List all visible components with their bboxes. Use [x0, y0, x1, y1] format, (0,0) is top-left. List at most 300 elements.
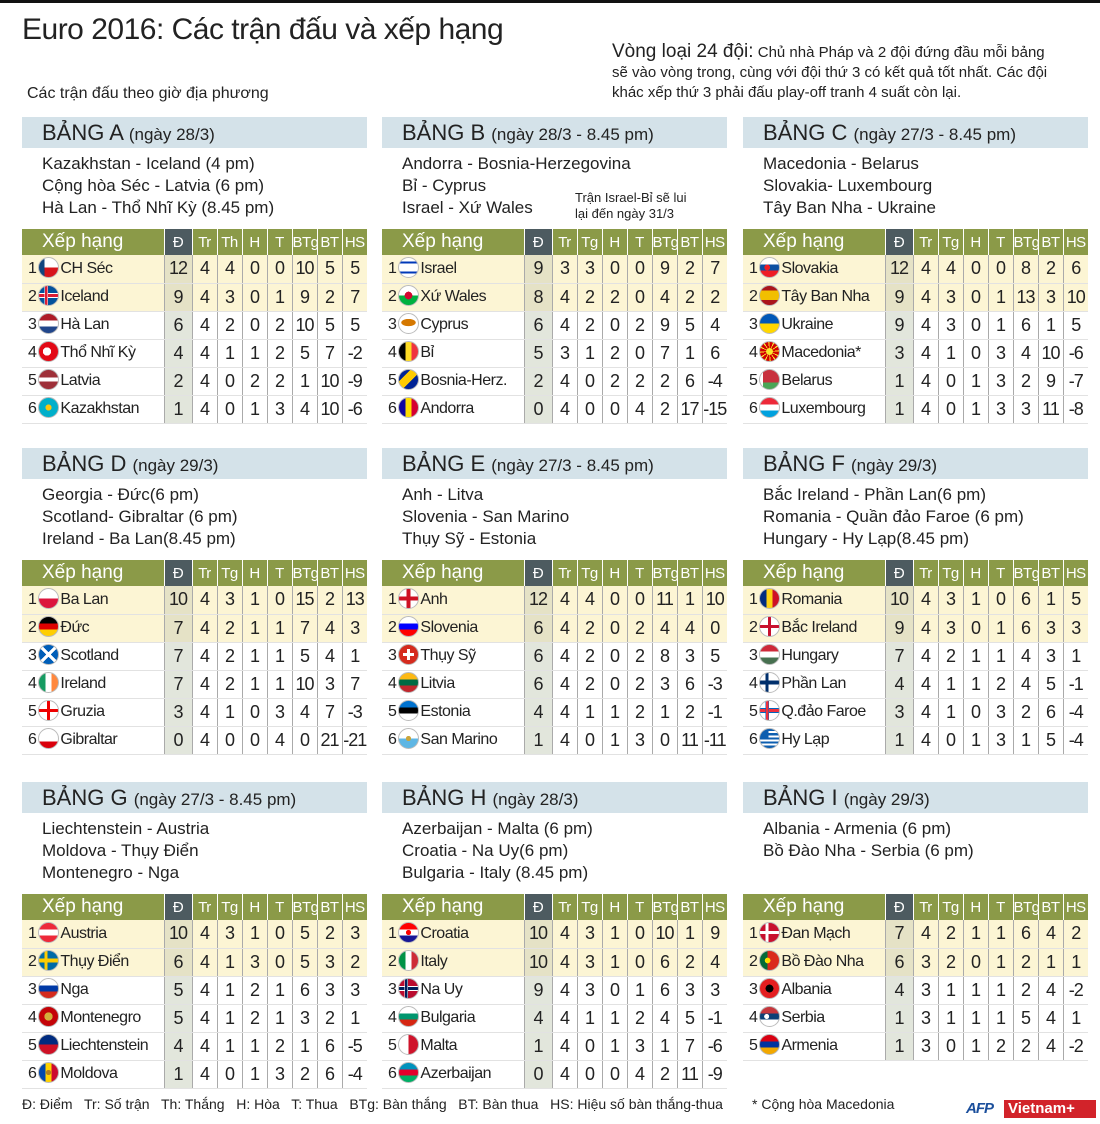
- standings table: 1: [946, 702, 955, 722]
- standings table: 4: [200, 1008, 209, 1028]
- standings table: 2: [635, 618, 644, 638]
- standings table: 1: [225, 1008, 234, 1028]
- matches: Montenegro - Nga: [42, 863, 179, 882]
- standings table: 1: [971, 398, 980, 418]
- standings table: Đ: [894, 898, 904, 916]
- standings table: 1: [250, 674, 259, 694]
- standings table: HS: [345, 564, 365, 582]
- standings table: Tg: [942, 564, 959, 582]
- standings table: 1: [610, 702, 619, 722]
- standings table: 5: [325, 314, 334, 334]
- standings table: Xếp hạng: [402, 231, 483, 252]
- standings table: 2: [275, 370, 284, 390]
- standings table: 4: [560, 702, 569, 722]
- standings table: 3: [275, 398, 284, 418]
- standings table: 0: [971, 952, 980, 972]
- standings table: 3: [585, 980, 594, 1000]
- standings table: 4: [1021, 674, 1030, 694]
- standings table: -6: [348, 398, 362, 418]
- standings table: 1 Anh: [388, 591, 447, 608]
- standings table: 1: [1046, 589, 1055, 609]
- standings table: 9: [1046, 370, 1055, 390]
- standings table: 2: [1046, 258, 1055, 278]
- standings table: 12: [890, 258, 908, 278]
- standings table: 4: [560, 674, 569, 694]
- standings table: T: [275, 898, 284, 916]
- standings table: 3: [225, 923, 234, 943]
- standings table: 0: [225, 730, 234, 750]
- legend: Đ: Điểm Tr: Số trận Th: Thắng H: Hòa T: Thua BTg: Bàn thắng BT: Bàn thua HS: Hiệu số bàn thắng-thua: [22, 1096, 723, 1112]
- standings table: 0: [275, 258, 284, 278]
- logo: [966, 1100, 1096, 1118]
- standings table: 4 Litvia: [388, 675, 455, 692]
- standings table: -21: [343, 730, 366, 750]
- standings table: [382, 894, 727, 1089]
- standings table: 5 Gruzia: [28, 703, 105, 720]
- panel: group B: [382, 117, 727, 424]
- standings table: BT: [320, 234, 339, 250]
- standings table: Tr: [198, 564, 211, 582]
- standings table: Tg: [581, 234, 598, 250]
- standings table: H: [249, 234, 260, 250]
- standings table: T: [635, 234, 644, 250]
- standings table: 3: [996, 342, 1005, 362]
- standings table: 5 Latvia: [28, 372, 100, 389]
- standings table: 10: [295, 674, 314, 694]
- standings table: 2: [225, 314, 234, 334]
- standings table: T: [996, 898, 1005, 916]
- standings table: -9: [708, 1064, 722, 1084]
- standings table: -15: [703, 398, 726, 418]
- panel: group D: [22, 448, 367, 755]
- standings table: 1: [946, 674, 955, 694]
- matches: Albania - Armenia (6 pm): [763, 819, 951, 838]
- standings table: 3: [946, 314, 955, 334]
- standings table: HS: [705, 564, 725, 582]
- standings table: 2: [1021, 1036, 1030, 1056]
- standings table: 4: [894, 674, 904, 694]
- standings table: 0: [250, 258, 259, 278]
- standings table: 1 CH Séc: [28, 260, 113, 277]
- standings table: 1: [225, 342, 234, 362]
- standings table: -4: [1069, 730, 1083, 750]
- standings table: 9: [894, 286, 904, 306]
- standings table: 3: [946, 589, 955, 609]
- standings table: Tg: [221, 564, 238, 582]
- standings table: 1: [250, 646, 259, 666]
- standings table: 1: [275, 980, 284, 1000]
- standings table: -7: [1069, 370, 1083, 390]
- standings table: 8: [660, 646, 669, 666]
- standings table: 1: [610, 952, 619, 972]
- standings table: Đ: [894, 234, 904, 250]
- matches: Azerbaijan - Malta (6 pm): [402, 819, 593, 838]
- standings table: 4 Thổ Nhĩ Kỳ: [28, 344, 135, 361]
- standings table: 1: [660, 1036, 669, 1056]
- logo: Vietnam+: [1008, 1100, 1075, 1117]
- standings table: 13: [346, 589, 364, 609]
- standings table: 1: [1071, 646, 1080, 666]
- standings table: 3: [921, 1008, 930, 1028]
- standings table: 2: [685, 952, 694, 972]
- title: Euro 2016: Các trận đấu và xếp hạng: [22, 13, 503, 46]
- group header: BẢNG A (ngày 28/3): [42, 120, 215, 145]
- standings table: 0: [946, 370, 955, 390]
- standings table: 2: [610, 370, 619, 390]
- standings table: 1: [996, 1008, 1005, 1028]
- standings table: 4: [560, 1064, 569, 1084]
- standings table: -8: [1069, 398, 1083, 418]
- standings table: 0: [635, 286, 644, 306]
- standings table: Xếp hạng: [402, 896, 483, 917]
- standings table: 3 Albania: [749, 981, 831, 998]
- standings table: 2: [946, 923, 955, 943]
- standings table: 1: [610, 730, 619, 750]
- standings table: 4: [560, 923, 569, 943]
- standings table: 0: [300, 730, 309, 750]
- standings table: 10: [890, 589, 908, 609]
- standings table: 0: [660, 730, 669, 750]
- standings table: 4: [660, 1008, 669, 1028]
- standings table: 4: [560, 730, 569, 750]
- group header: BẢNG D (ngày 29/3): [42, 451, 218, 476]
- standings table: 3: [225, 589, 234, 609]
- standings table: 2: [685, 258, 694, 278]
- standings table: 1: [250, 923, 259, 943]
- standings table: 0: [635, 923, 644, 943]
- standings table: 2: [533, 370, 542, 390]
- standings table: 0: [610, 258, 619, 278]
- logo: AFP: [966, 1100, 993, 1117]
- standings table: 2: [250, 370, 259, 390]
- standings table: 3: [996, 730, 1005, 750]
- note: [575, 190, 686, 221]
- standings table: 10: [295, 258, 314, 278]
- standings table: 1: [225, 1036, 234, 1056]
- standings table: 2: [610, 286, 619, 306]
- standings table: 2 Bắc Ireland: [749, 619, 857, 636]
- standings table: 5: [685, 1008, 694, 1028]
- standings table: 4: [200, 370, 209, 390]
- standings table: 4: [533, 1008, 542, 1028]
- standings table: 5 Estonia: [388, 703, 470, 720]
- group header: [382, 117, 727, 148]
- standings table: 1: [533, 730, 542, 750]
- standings table: 1: [1021, 730, 1030, 750]
- standings table: 4: [921, 342, 930, 362]
- standings table: 4: [635, 398, 644, 418]
- standings table: 1: [971, 589, 980, 609]
- standings table: BT: [680, 898, 699, 916]
- standings table: 1: [946, 980, 955, 1000]
- standings table: 1: [971, 1036, 980, 1056]
- standings table: [743, 229, 1088, 424]
- standings table: 10: [655, 923, 674, 943]
- standings table: 1: [225, 952, 234, 972]
- standings table: 15: [295, 589, 314, 609]
- standings table: 1: [996, 646, 1005, 666]
- standings table: 1: [1071, 1008, 1080, 1028]
- standings table: 4: [560, 618, 569, 638]
- standings table: 10: [529, 923, 547, 943]
- standings table: 9: [173, 286, 182, 306]
- standings table: 8: [533, 286, 542, 306]
- standings table: 2: [946, 646, 955, 666]
- standings table: 4: [921, 258, 930, 278]
- standings table: 4: [173, 342, 182, 362]
- standings table: 1: [275, 1008, 284, 1028]
- standings table: 4: [1046, 1008, 1055, 1028]
- standings table: 1: [350, 646, 359, 666]
- standings table: -6: [708, 1036, 722, 1056]
- standings table: 4: [225, 258, 234, 278]
- standings table: 0: [610, 674, 619, 694]
- standings table: 1: [635, 980, 644, 1000]
- standings table: 0: [635, 589, 644, 609]
- standings table: Xếp hạng: [42, 896, 123, 917]
- standings table: Xếp hạng: [763, 896, 844, 917]
- group header: BẢNG F (ngày 29/3): [763, 451, 937, 476]
- standings table: 3: [685, 980, 694, 1000]
- standings table: BTg: [1014, 234, 1040, 250]
- standings table: 4: [921, 286, 930, 306]
- standings table: 3: [685, 646, 694, 666]
- standings table: 2 Bồ Đào Nha: [749, 953, 864, 970]
- standings table: 0: [610, 980, 619, 1000]
- standings table: 0: [946, 730, 955, 750]
- standings table: 4: [560, 952, 569, 972]
- standings table: Tr: [919, 564, 932, 582]
- group header: BẢNG C (ngày 27/3 - 8.45 pm): [763, 120, 1016, 145]
- standings table: 1: [1071, 952, 1080, 972]
- standings table: -1: [708, 1008, 722, 1028]
- standings table: 6: [533, 674, 542, 694]
- standings table: 6: [325, 1036, 334, 1056]
- group header: [382, 782, 727, 813]
- standings table: 4: [921, 370, 930, 390]
- standings table: H: [970, 564, 981, 582]
- standings table: -1: [1069, 674, 1083, 694]
- standings table: 2 Xứ Wales: [388, 288, 486, 305]
- standings table: 1: [996, 286, 1005, 306]
- standings table: 1: [225, 980, 234, 1000]
- standings table: BT: [1041, 898, 1060, 916]
- standings table: 4: [173, 1036, 182, 1056]
- standings table: [743, 560, 1088, 755]
- standings table: 6 San Marino: [388, 731, 497, 748]
- standings table: 0: [250, 314, 259, 334]
- matches: Cộng hòa Séc - Latvia (6 pm): [42, 176, 264, 195]
- standings table: 4: [921, 923, 930, 943]
- standings table: -11: [704, 730, 726, 750]
- standings table: T: [635, 564, 644, 582]
- standings table: 0: [585, 398, 594, 418]
- matches: Andorra - Bosnia-Herzegovina: [402, 154, 631, 173]
- standings table: 3: [710, 980, 719, 1000]
- standings table: 6: [533, 646, 542, 666]
- standings table: 3: [325, 980, 334, 1000]
- standings table: 6 Moldova: [28, 1065, 117, 1082]
- group header: BẢNG H (ngày 28/3): [402, 785, 578, 810]
- standings table: Tr: [558, 564, 571, 582]
- standings table: Tr: [198, 898, 211, 916]
- standings table: 4: [200, 286, 209, 306]
- standings table: 1: [660, 702, 669, 722]
- standings table: 0: [610, 589, 619, 609]
- standings table: 10: [706, 589, 724, 609]
- standings table: -4: [348, 1064, 362, 1084]
- standings table: -2: [1069, 1036, 1083, 1056]
- matches: Bỉ - Cyprus: [402, 176, 486, 195]
- standings table: 5: [173, 980, 182, 1000]
- standings table: BT: [680, 564, 699, 582]
- standings table: 2: [275, 1036, 284, 1056]
- standings table: 4: [200, 952, 209, 972]
- standings table: 5 Malta: [388, 1037, 457, 1054]
- matches: Tây Ban Nha - Ukraine: [763, 198, 936, 217]
- group header: [743, 782, 1088, 813]
- standings table: 4: [200, 1064, 209, 1084]
- standings table: 0: [585, 730, 594, 750]
- standings table: 3: [350, 618, 359, 638]
- standings table: 3: [585, 258, 594, 278]
- standings table: 4 Ireland: [28, 675, 106, 692]
- standings table: -3: [348, 702, 362, 722]
- standings table: 4: [685, 618, 694, 638]
- standings table: 4: [200, 646, 209, 666]
- standings table: -4: [708, 370, 722, 390]
- standings table: 1 Israel: [388, 260, 457, 277]
- standings table: 4: [1046, 980, 1055, 1000]
- standings table: 7: [173, 674, 182, 694]
- standings table: 4 Bỉ: [388, 344, 434, 361]
- standings table: HS: [705, 234, 725, 250]
- standings table: H: [970, 898, 981, 916]
- standings table: 2: [1021, 952, 1030, 972]
- standings table: 1 Slovakia: [749, 260, 838, 277]
- standings table: 0: [946, 398, 955, 418]
- standings table: HS: [1066, 564, 1086, 582]
- standings table: HS: [1066, 234, 1086, 250]
- matches: [42, 154, 274, 217]
- standings table: 0: [173, 730, 182, 750]
- standings table: 7: [325, 342, 334, 362]
- standings table: 5: [300, 952, 309, 972]
- panel: group G: [22, 782, 367, 1089]
- standings table: 1: [971, 370, 980, 390]
- standings table: 1: [250, 618, 259, 638]
- standings table: 2: [660, 370, 669, 390]
- standings table: 7: [710, 258, 719, 278]
- standings table: 3: [921, 980, 930, 1000]
- standings table: 6: [1071, 258, 1080, 278]
- standings table: 1: [1046, 314, 1055, 334]
- standings table: 3: [275, 1064, 284, 1084]
- standings table: Tr: [198, 234, 211, 250]
- standings table: 4: [200, 618, 209, 638]
- standings table: BT: [680, 234, 699, 250]
- standings table: T: [996, 564, 1005, 582]
- standings table: Tr: [558, 898, 571, 916]
- standings table: 7: [894, 646, 904, 666]
- standings table: -2: [1069, 980, 1083, 1000]
- standings table: 3: [894, 702, 904, 722]
- matches: Georgia - Đức(6 pm): [42, 485, 199, 504]
- group header: BẢNG E (ngày 27/3 - 8.45 pm): [402, 451, 654, 476]
- standings table: 4: [300, 702, 309, 722]
- standings table: T: [275, 564, 284, 582]
- standings table: 3: [1071, 618, 1080, 638]
- standings table: 2: [585, 674, 594, 694]
- standings table: 1: [996, 618, 1005, 638]
- standings table: 3: [560, 258, 569, 278]
- standings table: 9: [660, 314, 669, 334]
- standings table: Đ: [533, 898, 543, 916]
- standings table: 0: [971, 286, 980, 306]
- standings table: 4: [560, 1036, 569, 1056]
- standings table: 10: [1067, 286, 1085, 306]
- standings table: 0: [585, 370, 594, 390]
- standings table: 2: [996, 674, 1005, 694]
- standings table: 2: [585, 646, 594, 666]
- standings table: 0: [635, 952, 644, 972]
- standings table: -4: [1069, 702, 1083, 722]
- standings table: 0: [996, 589, 1005, 609]
- matches: Slovakia- Luxembourg: [763, 176, 932, 195]
- standings table: 4: [200, 980, 209, 1000]
- standings table: 3: [1046, 618, 1055, 638]
- standings table: 5: [1071, 314, 1080, 334]
- standings table: 4: [921, 674, 930, 694]
- matches: [402, 154, 631, 217]
- standings table: 4: [921, 702, 930, 722]
- subtitle: Các trận đấu theo giờ địa phương: [27, 85, 269, 102]
- standings table: 3: [635, 1036, 644, 1056]
- matches: Hungary - Hy Lạp(8.45 pm): [763, 529, 969, 548]
- group header: BẢNG I (ngày 29/3): [763, 785, 930, 810]
- standings table: BTg: [652, 234, 679, 250]
- standings table: Tg: [581, 898, 598, 916]
- standings table: 5 Q.đảo Faroe: [749, 703, 866, 720]
- standings table: H: [249, 898, 260, 916]
- standings table: Tg: [942, 234, 959, 250]
- group header: [382, 448, 727, 479]
- standings table: -5: [348, 1036, 362, 1056]
- standings table: 11: [1042, 398, 1059, 418]
- standings table: 3: [350, 980, 359, 1000]
- standings table: BT: [1041, 564, 1060, 582]
- standings table: 1 Đan Mạch: [749, 925, 850, 942]
- standings table: 4: [560, 589, 569, 609]
- standings table: Xếp hạng: [42, 562, 123, 583]
- standings table: HS: [345, 234, 365, 250]
- standings table: 3: [585, 952, 594, 972]
- standings table: 1: [996, 980, 1005, 1000]
- standings table: Tg: [942, 898, 959, 916]
- standings table: HS: [1066, 898, 1086, 916]
- standings table: 4: [921, 314, 930, 334]
- standings table: 3: [325, 674, 334, 694]
- standings table: 0: [996, 258, 1005, 278]
- standings table: -6: [1069, 342, 1083, 362]
- standings table: BTg: [652, 564, 679, 582]
- standings table: 6: [710, 342, 719, 362]
- standings table: 2: [1071, 923, 1080, 943]
- matches: Ireland - Ba Lan(8.45 pm): [42, 529, 236, 548]
- standings table: 7: [350, 674, 359, 694]
- standings table: 3: [921, 952, 930, 972]
- standings table: 2: [250, 1008, 259, 1028]
